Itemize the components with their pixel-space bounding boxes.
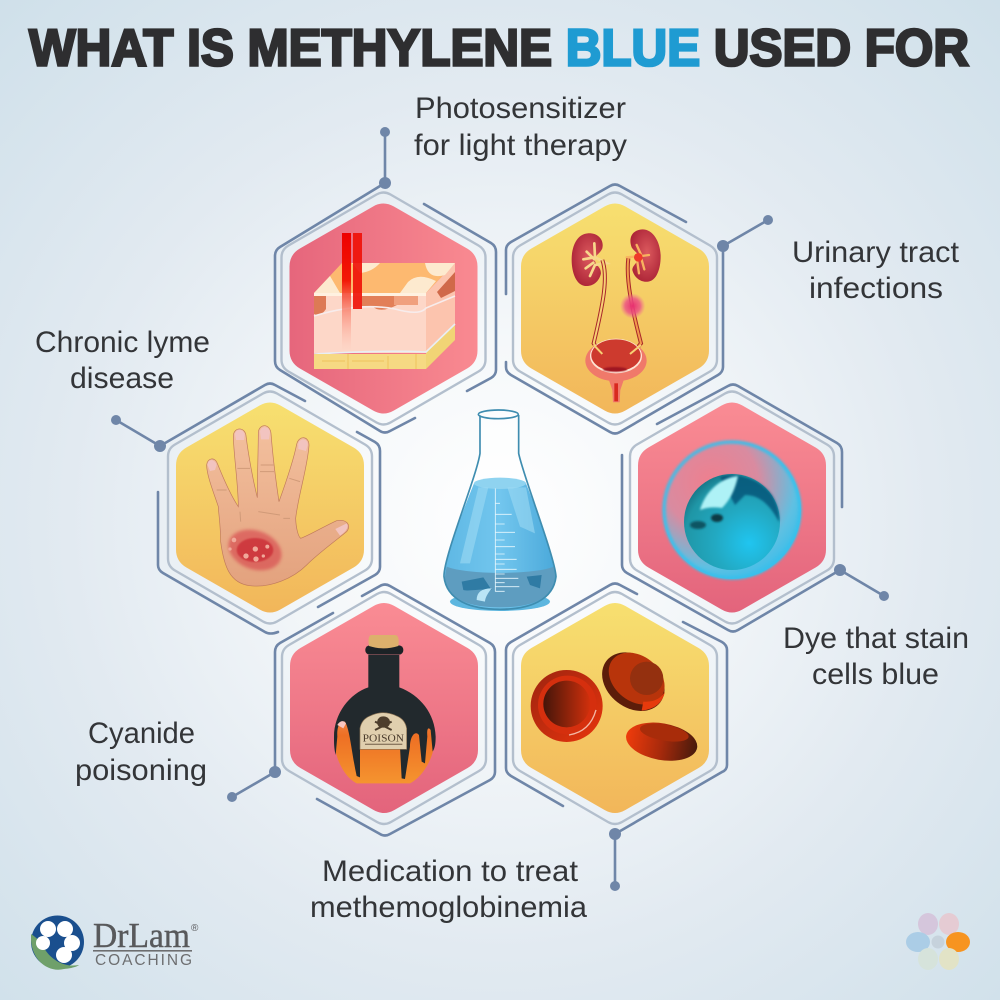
icon: poison bottle: POISON	[363, 733, 405, 744]
logo: DrLam Coaching: DrLam	[93, 916, 190, 955]
label: urinary tract infections: infections	[809, 272, 943, 305]
icon: red blood cells	[531, 640, 700, 766]
label: cyanide poisoning: poisoning	[75, 754, 207, 787]
label: chronic lyme disease	[35, 326, 210, 395]
label: dye that stain cells blue: Dye that stain	[783, 622, 969, 655]
logo: DrLam Coaching	[31, 916, 199, 970]
connector dots	[111, 127, 889, 891]
icon: kidneys, ureters and bladder	[572, 229, 661, 402]
logo: flower mark	[906, 913, 970, 970]
logo: DrLam Coaching: COACHING	[95, 952, 192, 969]
panel: methemoglobinemia hexagon	[513, 592, 717, 824]
label: photosensitizer: for light therapy	[414, 129, 627, 162]
label: medication to treat methemoglobinemia: methemoglobinemia	[310, 891, 587, 924]
panel: lyme hexagon	[168, 392, 372, 624]
label: photosensitizer	[414, 92, 627, 162]
label: dye that stain cells blue	[783, 622, 969, 691]
label: chronic lyme disease: Chronic lyme	[35, 326, 210, 359]
icon: stained cell	[663, 441, 801, 579]
panel: dye hexagon	[630, 392, 834, 624]
icon: skin cross-section with laser	[314, 233, 455, 369]
connector lines and outer hexagon rings	[116, 132, 884, 886]
panel: cyanide hexagon	[282, 592, 486, 824]
label: urinary tract infections	[792, 236, 960, 305]
panel: urinary hexagon	[513, 192, 717, 424]
label: chronic lyme disease: disease	[70, 362, 174, 395]
label: urinary tract infections: Urinary tract	[792, 236, 960, 269]
label: medication to treat methemoglobinemia	[310, 855, 587, 924]
label: medication to treat methemoglobinemia: Medication to treat	[322, 855, 579, 888]
label: cyanide poisoning	[75, 717, 207, 787]
panel: light therapy hexagon	[282, 192, 486, 424]
title: WHAT IS METHYLENE BLUE USED FOR	[29, 20, 969, 78]
label: cyanide poisoning: Cyanide	[88, 717, 195, 750]
icon: hand with rash	[207, 426, 349, 586]
label: dye that stain cells blue: cells blue	[812, 658, 939, 691]
icon: poison bottle	[334, 635, 436, 783]
icon: flask with blue liquid	[444, 410, 556, 611]
logo: DrLam Coaching: ®	[191, 923, 199, 934]
label: photosensitizer: Photosensitizer	[415, 92, 626, 125]
